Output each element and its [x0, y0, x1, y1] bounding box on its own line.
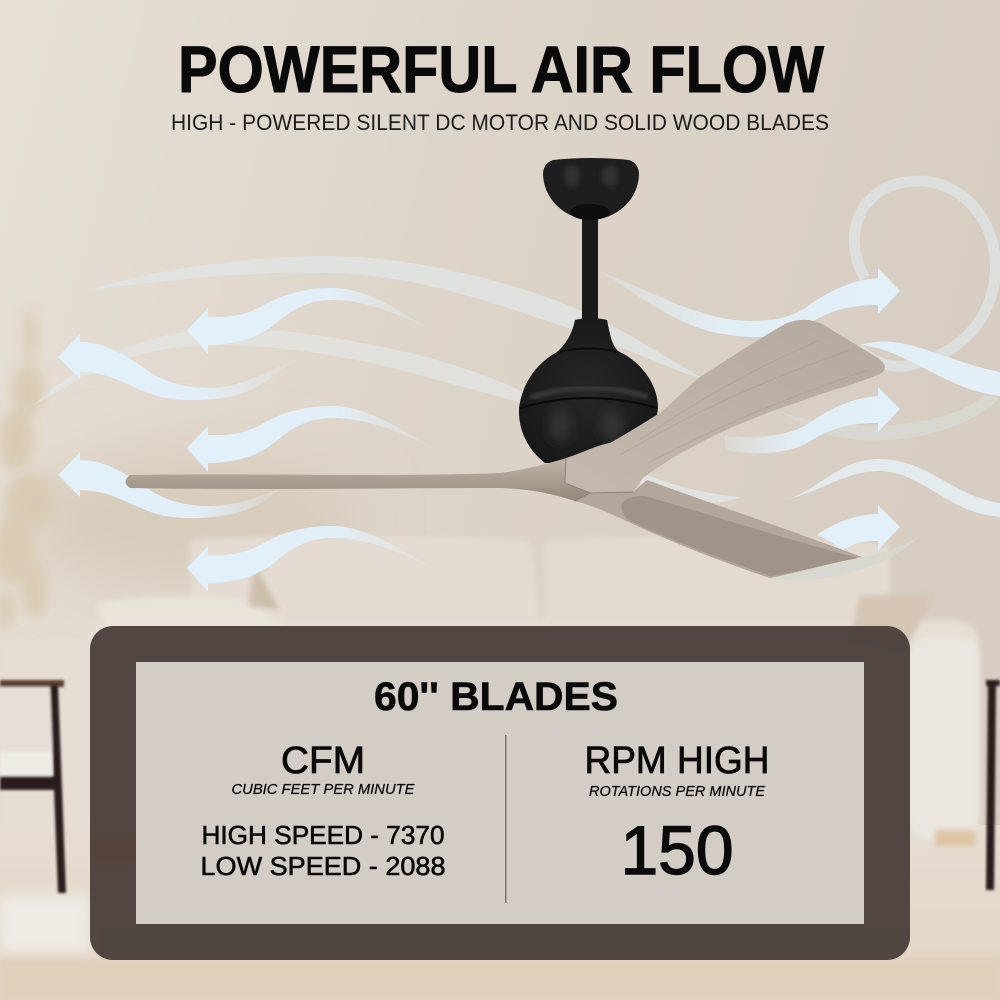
- faded air swirl lines: [34, 181, 1000, 580]
- left chair: [0, 680, 66, 893]
- airflow arrow right 3: [817, 505, 900, 550]
- column: RPM: ROTATIONS PER MINUTE: [589, 784, 765, 800]
- column: CFM: [200, 740, 446, 881]
- column: CFM: LOW SPEED - 2088: [200, 851, 446, 881]
- column: CFM: CUBIC FEET PER MINUTE: [232, 782, 415, 798]
- subheading: HIGH - POWERED SILENT DC MOTOR AND SOLID WOOD BLADES: [171, 110, 829, 135]
- blade wood grain: [200, 340, 868, 481]
- panel: specs: [90, 626, 910, 960]
- column: RPM: [584, 740, 770, 889]
- column: CFM: CFM: [281, 740, 365, 782]
- sofa: [85, 535, 980, 846]
- panel card: [136, 662, 864, 924]
- airflow arrow right 2: [725, 387, 900, 453]
- panel frame: [90, 626, 910, 960]
- heading: POWERFUL AIR FLOW: [178, 32, 825, 106]
- ceiling fan: [126, 158, 885, 578]
- hub seams: [565, 459, 633, 501]
- right chair: [986, 680, 1000, 890]
- wood patch showing through frame: [92, 835, 136, 862]
- downrod: [582, 212, 598, 324]
- column: RPM: RPM HIGH: [584, 740, 770, 782]
- pampas grass: [0, 307, 54, 630]
- blade: upper right: [565, 320, 885, 493]
- column: RPM: 150: [620, 812, 734, 889]
- motor housing: [519, 318, 658, 463]
- blades heading: 60'' BLADES: [374, 675, 618, 719]
- airflow arrow inner left 1: [187, 288, 427, 354]
- blade: left: [126, 458, 590, 501]
- airflow arrow far left 1: [58, 334, 295, 400]
- airflow arrow inner left 2: [187, 406, 435, 472]
- airflow arrow inner left 3: [187, 526, 435, 592]
- divider line: [505, 735, 506, 903]
- ceiling canopy: [543, 158, 639, 220]
- airflow arrow far left 2: [58, 452, 282, 518]
- column: CFM: HIGH SPEED - 7370: [202, 820, 444, 850]
- airflow arrow right 1: [600, 268, 900, 337]
- blade: lower right: [575, 480, 862, 578]
